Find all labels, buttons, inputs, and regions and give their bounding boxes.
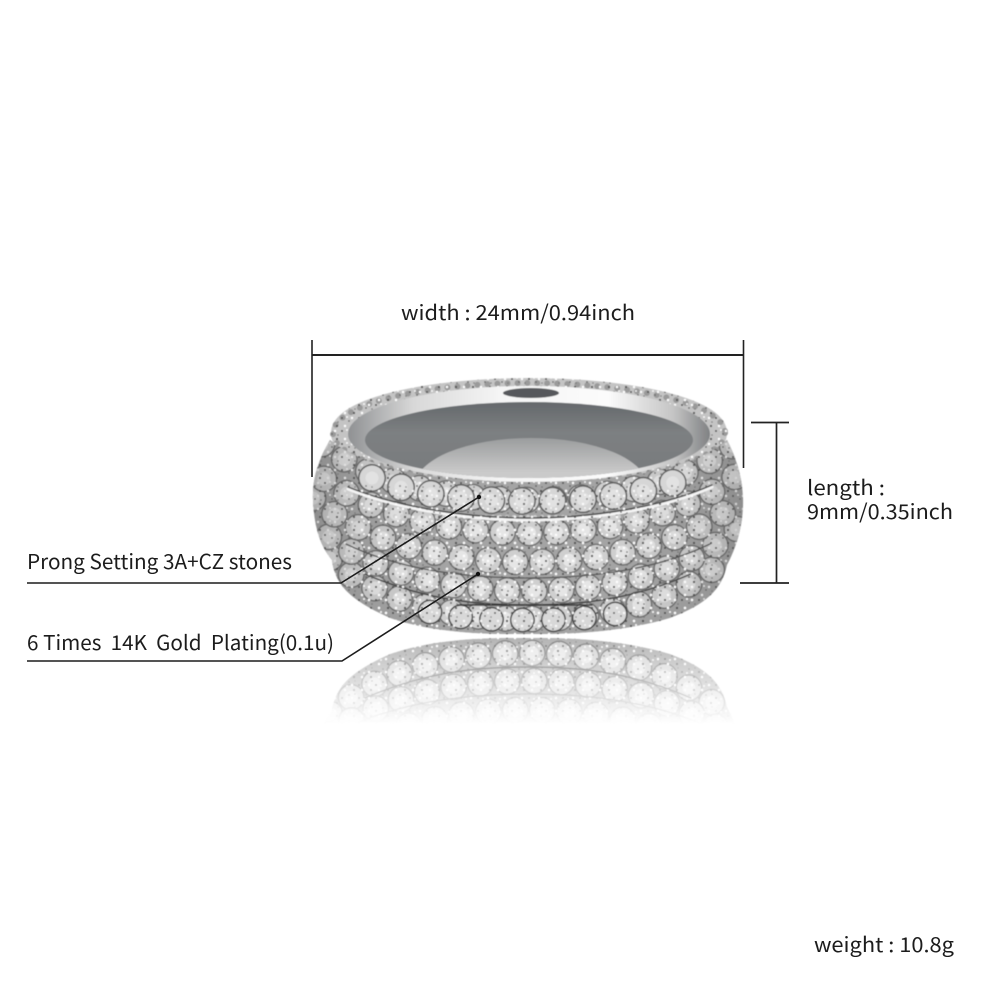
callout: gold plating: 6 Times 14K Gold Plating(0.1u) xyxy=(27,626,334,656)
callout: prong setting stones: Prong Setting 3A+CZ stones xyxy=(27,545,292,575)
width dimension bracket xyxy=(312,340,744,477)
length label xyxy=(807,471,953,525)
width label: width : 24mm/0.94inch xyxy=(401,296,635,326)
front row of prong-set stones xyxy=(348,478,712,520)
length dimension bracket xyxy=(740,422,789,583)
callout: gold plating xyxy=(27,572,480,661)
stone facet texture xyxy=(360,484,695,630)
ring interior xyxy=(364,402,694,478)
ring reflection xyxy=(334,637,729,718)
weight label: weight : 10.8g xyxy=(814,928,954,958)
polished silver inner band xyxy=(348,386,710,482)
interior glare xyxy=(503,388,559,398)
ring back rim stones xyxy=(333,383,725,483)
stone body xyxy=(305,430,750,640)
length label: 9mm/0.35inch xyxy=(807,495,953,525)
bottom row of prong-set stones xyxy=(430,605,626,620)
callout: prong setting stones xyxy=(27,495,481,583)
ring photo xyxy=(305,383,750,640)
length label: length : xyxy=(807,471,885,501)
